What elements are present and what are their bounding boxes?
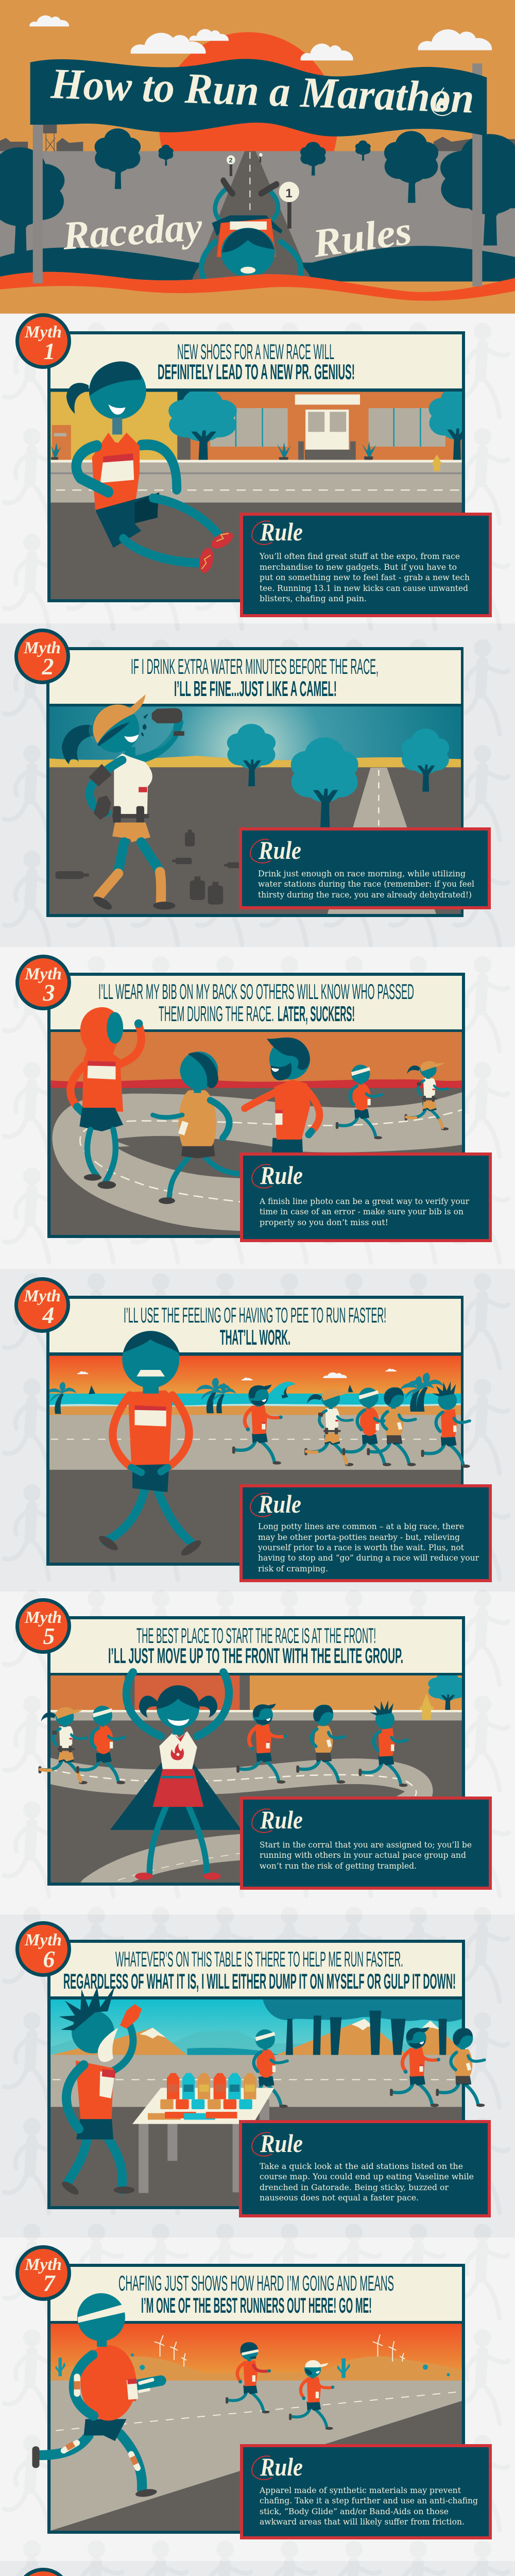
rule box: Apparel made of synthetic materials may prevent <box>259 2486 461 2495</box>
rule box: running with others in your actual pace group and <box>260 1851 466 1860</box>
panel: myth 8 <box>24 2568 63 2576</box>
rule box <box>239 1484 492 1582</box>
figure: girl runner <box>153 1052 243 1204</box>
rule box: put on something new to feel fast - grab a new tech <box>260 573 470 582</box>
rule box: chafing. Take it a step further and use an anti-chafing <box>260 2496 478 2505</box>
scene: start area <box>43 1671 467 1889</box>
badge: myth 3: Myth <box>24 965 62 984</box>
mile marker 2: 2 <box>229 157 233 164</box>
rule box <box>239 827 491 909</box>
rule box: risk of cramping. <box>258 1564 328 1573</box>
badge: myth 1: Myth <box>24 323 62 342</box>
rule box: A finish line photo can be a great way to verify your <box>259 1197 470 1206</box>
rule box: Rule <box>260 1161 303 1190</box>
badge: myth 1 <box>15 313 71 369</box>
rule box: Take a quick look at the aid stations listed on the <box>260 2162 463 2171</box>
panel: myth 5 <box>15 1598 492 1890</box>
badge: myth 4 <box>14 1277 70 1333</box>
badge: myth 4: 4 <box>42 1302 55 1328</box>
rule box: Rule <box>260 1805 303 1834</box>
rule box <box>240 1797 492 1890</box>
heading: myth 3 <box>98 979 414 1026</box>
figure: hooded runner with bib on back <box>71 1007 143 1189</box>
badge: myth 6 <box>15 1921 71 1977</box>
heading: myth 3: LATER, SUCKERS! <box>278 1002 355 1026</box>
badge: myth 5: 5 <box>43 1623 55 1649</box>
figures and table <box>59 1986 485 2197</box>
panel: myth 2 <box>14 629 491 917</box>
title: How to Run a Marathon <box>49 60 475 123</box>
figures: runners on beach road <box>97 1331 470 1558</box>
scene: shop street <box>50 387 484 604</box>
panel: myth 3 <box>15 955 492 1242</box>
figure: headband runner <box>336 1064 382 1139</box>
rule box <box>240 1153 492 1242</box>
icon: flame in title <box>432 88 454 115</box>
badge: myth 6: 6 <box>43 1946 55 1972</box>
rule box: water stations during the race (remember: if you feel <box>258 879 474 889</box>
rule box: merchandise to new gadgets. But if you have to <box>260 563 457 572</box>
rule box: having to stop and “go” during a race will reduce your <box>258 1553 479 1563</box>
mile marker 1: 1 <box>285 187 293 200</box>
scene: aid station <box>50 1999 462 2209</box>
rule box: blisters, chafing and pain. <box>260 594 367 603</box>
heading: myth 1 <box>158 340 355 384</box>
rule box: Drink just enough on race morning, while utilizing <box>258 869 466 878</box>
rule box: Rule <box>260 517 303 546</box>
rule box: time in case of an error - make sure your bib is on <box>260 1207 464 1216</box>
figure: small runners <box>226 2342 271 2413</box>
rule box: may be other porta-potties nearby - but, relieving <box>258 1533 460 1542</box>
figures: passed runners <box>71 1007 449 1204</box>
panel: hero banner <box>0 0 515 314</box>
figure: ponytail runner <box>405 1061 449 1130</box>
rule box: Rule <box>258 836 301 865</box>
badge: myth 7 <box>15 2245 71 2301</box>
figure: mohawk runner drinking <box>59 1986 142 2197</box>
rule box: properly so you don’t miss out! <box>260 1218 388 1227</box>
subtitle: Rules: Rules <box>310 208 414 266</box>
panel: myth 4 <box>14 1277 492 1582</box>
badge: myth 4: Myth <box>23 1287 61 1306</box>
badge: myth 8 <box>15 2568 71 2576</box>
heading: myth 5 <box>108 1623 403 1668</box>
figure: woman drinking water <box>62 694 184 912</box>
badge: myth 7: 7 <box>43 2270 56 2296</box>
figure: runner in new shoes <box>66 362 235 575</box>
figure: bearded runner <box>245 1038 319 1155</box>
heading: myth 7 <box>118 2271 394 2317</box>
rule box <box>239 2120 491 2217</box>
table with drinks <box>132 2073 274 2193</box>
panel: myth 1 <box>15 313 492 617</box>
rule box: You’ll often find great stuff at the expo, from race <box>259 552 460 561</box>
rule box: Long potty lines are common – at a big race, there <box>258 1522 464 1531</box>
heading: myth 3: THEM DURING THE RACE. <box>159 1002 274 1026</box>
badge: myth 3 <box>15 955 71 1010</box>
rule box: nauseous does not equal a faster pace. <box>260 2193 419 2202</box>
rule box: Rule <box>260 2452 303 2481</box>
figure: small runners <box>239 2029 288 2108</box>
rule box: thirsty during the race, you are already dehydrated!) <box>258 890 472 900</box>
badge: myth 5: Myth <box>24 1608 62 1627</box>
badge: myth 2: Myth <box>23 639 61 657</box>
rule box <box>240 2444 492 2539</box>
heading: myth 2 <box>131 654 379 701</box>
rule box: drenched in Gatorade. Being sticky, buzzed or <box>260 2183 449 2192</box>
rule box: stick, “Body Glide” and/or Band-Aids on those <box>260 2507 449 2516</box>
panel: myth 7 <box>15 2245 492 2539</box>
badge: myth 7: Myth <box>24 2256 62 2274</box>
panel: myth 6 <box>15 1921 491 2217</box>
scene: looping road <box>50 1032 467 1236</box>
scene: beach road <box>45 1356 461 1564</box>
badge: myth 2 <box>14 629 70 684</box>
figure: big runner with band-aids <box>32 2293 161 2498</box>
rule box: Rule <box>260 2129 303 2158</box>
badge: myth 3: 3 <box>42 979 55 1006</box>
heading: myth 6 <box>63 1947 456 1993</box>
scene: desert highway <box>50 2324 462 2532</box>
figure: superhero girl <box>110 1672 242 1880</box>
rule box: Rule <box>258 1489 301 1518</box>
figures: chafed runners <box>32 2293 334 2498</box>
heading: myth 4 <box>124 1303 386 1349</box>
badge: myth 2: 2 <box>41 653 54 680</box>
rule box <box>240 513 492 617</box>
rule box: yourself prior to a race is worth the wait. Plus, not <box>258 1543 465 1552</box>
rule box: Start in the corral that you are assigned to; you’ll be <box>260 1840 472 1850</box>
rule box: tee. Running 13.1 in new kicks can cause unwanted <box>260 584 468 593</box>
rule box: won’t run the risk of getting trampled. <box>260 1861 417 1871</box>
figures: start area runners <box>39 1672 408 1880</box>
badge: myth 5 <box>15 1598 71 1654</box>
subtitle: Raceday: Raceday <box>61 204 204 258</box>
scene: desert road <box>49 706 461 916</box>
rule box: course map. You could end up eating Vaseline while <box>260 2172 474 2181</box>
figure: small runners <box>39 1707 88 1784</box>
badge: myth 1: 1 <box>43 338 56 364</box>
figure: man needing a bathroom <box>97 1331 203 1558</box>
figure: small runners <box>232 1385 283 1465</box>
heading: myth 4: THAT’LL WORK. <box>220 1325 290 1349</box>
badge: myth 6: Myth <box>24 1931 62 1950</box>
rule box: awkward areas that will likely suffer from friction. <box>260 2517 465 2527</box>
